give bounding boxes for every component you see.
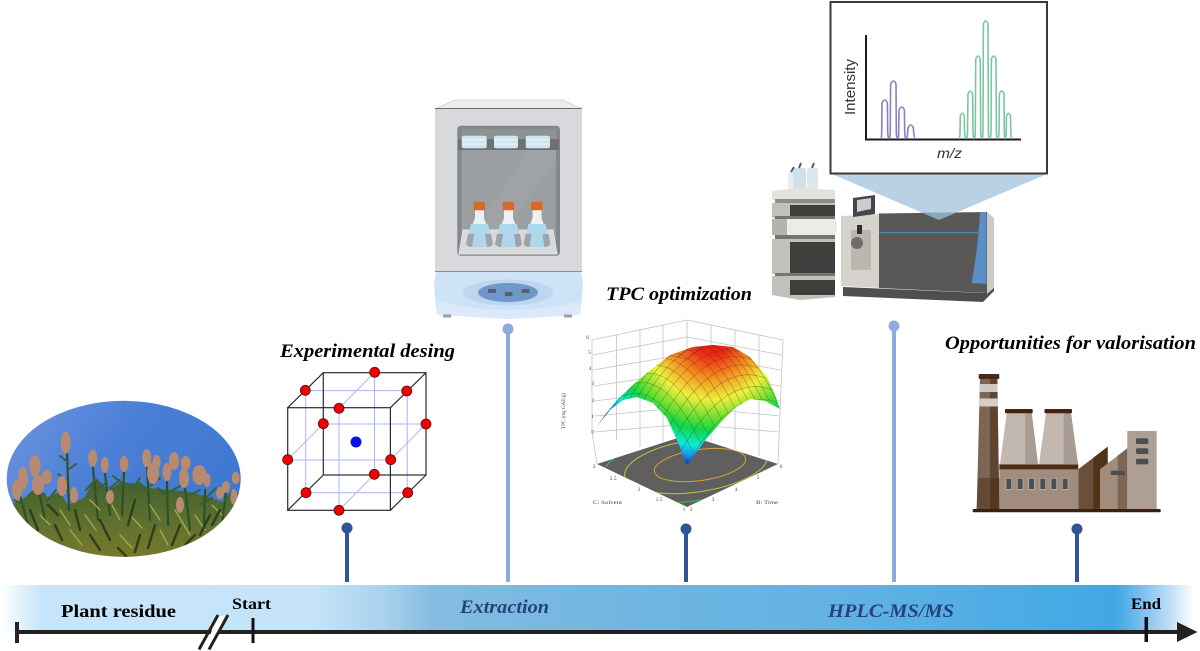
label: HPLC-MS/MS: HPLC-MS/MS xyxy=(827,601,954,622)
pin: valorisation marker xyxy=(1072,524,1082,582)
axis labels: 2 xyxy=(592,398,595,404)
sawtooth roofs xyxy=(1078,447,1108,509)
axis labels: TPC (mg GAE/g) xyxy=(560,393,567,429)
axis break xyxy=(206,616,224,650)
callout connector: mass spectrum funnel xyxy=(832,174,1047,220)
shelf xyxy=(458,139,559,150)
window xyxy=(457,126,560,256)
chart: 3D response surface xyxy=(561,320,784,511)
axis labels: 4 xyxy=(589,366,592,372)
axis labels: 4 xyxy=(735,487,738,493)
axis labels: 3 xyxy=(593,464,596,470)
contours xyxy=(604,442,768,503)
floor xyxy=(597,435,778,507)
chart: cube experimental design xyxy=(283,367,431,515)
axis labels: 3 xyxy=(591,381,594,387)
solvent bottles xyxy=(788,163,818,189)
flasks xyxy=(467,202,550,247)
label: end: End xyxy=(1131,596,1161,613)
axis labels: 6 xyxy=(780,464,783,470)
heading: TPC optimization: TPC optimization xyxy=(606,285,752,305)
axis labels: 2 xyxy=(690,507,693,513)
label: extraction: Extraction xyxy=(459,598,549,618)
label: plant residue: Plant residue xyxy=(61,601,176,621)
side tower xyxy=(1127,431,1157,509)
pin: extraction marker xyxy=(502,324,514,582)
timeline axis with arrow xyxy=(15,615,1198,650)
surface xyxy=(597,345,780,465)
purple peaks xyxy=(881,81,915,138)
axis labels: 1 xyxy=(683,507,686,513)
axis labels: 5 xyxy=(757,475,760,481)
tray xyxy=(459,230,557,254)
axis labels xyxy=(560,335,783,513)
icon: factory xyxy=(973,374,1161,512)
axis labels: 2 xyxy=(638,487,641,493)
pin: TPC optimization marker xyxy=(680,524,692,582)
LC stack xyxy=(772,188,837,300)
clamps xyxy=(466,234,550,247)
timeline band xyxy=(0,585,1200,632)
mass spectrometer xyxy=(841,195,994,302)
ground xyxy=(973,509,1161,512)
axis labels: 6 xyxy=(586,335,589,341)
icon: reed plant photo xyxy=(0,401,245,560)
axis labels: 3 xyxy=(712,497,715,503)
axes xyxy=(866,35,1021,140)
back walls grid xyxy=(592,320,783,464)
heading: opportunities for valorisation: Opportunities for valorisation xyxy=(945,334,1196,354)
cabinet xyxy=(435,100,582,109)
axis labels: Intensity xyxy=(843,58,859,115)
main building xyxy=(999,469,1078,509)
axis labels: 1.5 xyxy=(656,497,663,503)
axis labels: 2.5 xyxy=(610,476,617,482)
petri dishes xyxy=(462,136,550,148)
axis labels: 1 xyxy=(591,414,594,420)
pin: experimental design marker xyxy=(342,522,352,582)
label: start: Start xyxy=(232,596,272,613)
panel: mass spectrum xyxy=(830,2,1047,174)
chimney xyxy=(977,378,999,509)
shaker base xyxy=(434,272,583,319)
heading: experimental design: Experimental desing xyxy=(279,342,455,362)
cooling towers xyxy=(1000,413,1038,464)
green peaks xyxy=(959,21,1012,138)
axis labels: 5 xyxy=(588,350,591,356)
axis labels: B: Time xyxy=(756,500,779,506)
axis labels: C: Solvent xyxy=(593,500,623,506)
axis labels: 0 xyxy=(591,430,594,436)
icon: HPLC-MS instrument xyxy=(772,163,994,302)
icon: incubator shaker xyxy=(434,100,583,319)
panel: mass spectrum: m/z xyxy=(937,145,962,161)
pin: HPLC-MS marker xyxy=(888,320,900,582)
